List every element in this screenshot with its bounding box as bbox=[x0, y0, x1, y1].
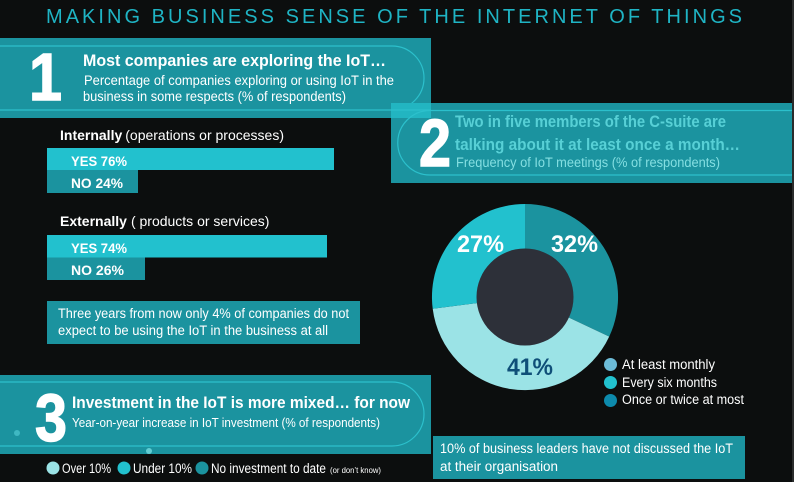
section 2 number: 2 bbox=[419, 106, 451, 181]
panel: section 3 header bbox=[0, 375, 431, 456]
label 32%: 32% bbox=[551, 231, 598, 258]
chart: externally bars bbox=[47, 213, 327, 280]
section 2 heading bbox=[455, 113, 740, 154]
legend: investment bbox=[46, 461, 381, 476]
bar: no 24%: NO 24% bbox=[71, 176, 123, 191]
callout: three years from now: Three years from now only 4% of companies do not bbox=[58, 306, 349, 321]
section 2 subheading: Frequency of IoT meetings (% of respondents) bbox=[456, 155, 720, 170]
externally label: Externally ( products or services) bbox=[60, 213, 269, 229]
bar: no 26%: NO 26% bbox=[71, 263, 124, 278]
legend: investment: Under 10% bbox=[133, 461, 192, 476]
section 3 number: 3 bbox=[35, 381, 67, 456]
legend: meeting frequency: At least monthly bbox=[622, 357, 715, 372]
callout: 10% of business leaders: 10% of business leaders have not discussed the IoT bbox=[440, 441, 733, 456]
panel: section 2 header bbox=[391, 103, 792, 183]
title: MAKING BUSINESS SENSE OF THE INTERNET OF THINGS bbox=[46, 6, 742, 28]
panel: section 1 header bbox=[0, 38, 431, 118]
callout: 10% of business leaders bbox=[433, 436, 745, 479]
chart: donut of IoT meeting frequency bbox=[432, 204, 618, 390]
callout: three years from now: expect to be using the IoT in the business at all bbox=[58, 323, 328, 338]
section 1 heading: Most companies are exploring the IoT… bbox=[83, 52, 386, 70]
chart: internally bars bbox=[47, 127, 334, 193]
legend: meeting frequency bbox=[604, 357, 744, 407]
legend: investment: No investment to date bbox=[211, 461, 326, 476]
section 1 subheading: business in some respects (% of respondents) bbox=[83, 89, 346, 104]
callout: 10% of business leaders: at their organisation bbox=[440, 459, 558, 474]
segment: 32% once or twice at most bbox=[525, 204, 618, 337]
section 2 heading: talking about it at least once a month… bbox=[455, 136, 740, 154]
bar: yes 76%: YES 76% bbox=[71, 154, 127, 169]
section 1 number: 1 bbox=[29, 40, 62, 115]
label 27%: 27% bbox=[457, 231, 504, 258]
section 3 heading: Investment in the IoT is more mixed… for now bbox=[72, 394, 410, 412]
section 1 subheading bbox=[83, 73, 394, 104]
legend: investment: Over 10% bbox=[62, 461, 111, 476]
bar: yes 74% bbox=[47, 235, 327, 258]
section 2 heading: Two in five members of the C-suite are bbox=[455, 113, 726, 131]
section 3 subheading: Year-on-year increase in IoT investment (% of respondents) bbox=[72, 415, 380, 430]
bar: no 26% bbox=[47, 258, 145, 280]
bar: yes 76% bbox=[47, 148, 334, 170]
segment: 41% at least monthly bbox=[433, 303, 609, 390]
label 41%: 41% bbox=[507, 354, 553, 381]
segment: 27% every six months bbox=[432, 204, 525, 309]
bar: yes 74%: YES 74% bbox=[71, 241, 127, 256]
legend: investment: (or don’t know) bbox=[330, 466, 381, 475]
donut centre bbox=[476, 248, 574, 346]
section 1 subheading: Percentage of companies exploring or using IoT in the bbox=[84, 73, 394, 88]
legend: meeting frequency: Every six months bbox=[622, 375, 717, 390]
callout: three years from now bbox=[47, 301, 360, 344]
legend: meeting frequency: Once or twice at most bbox=[622, 392, 744, 407]
bar: no 24% bbox=[47, 170, 138, 193]
internally label: Internally(operations or processes) bbox=[60, 127, 284, 143]
